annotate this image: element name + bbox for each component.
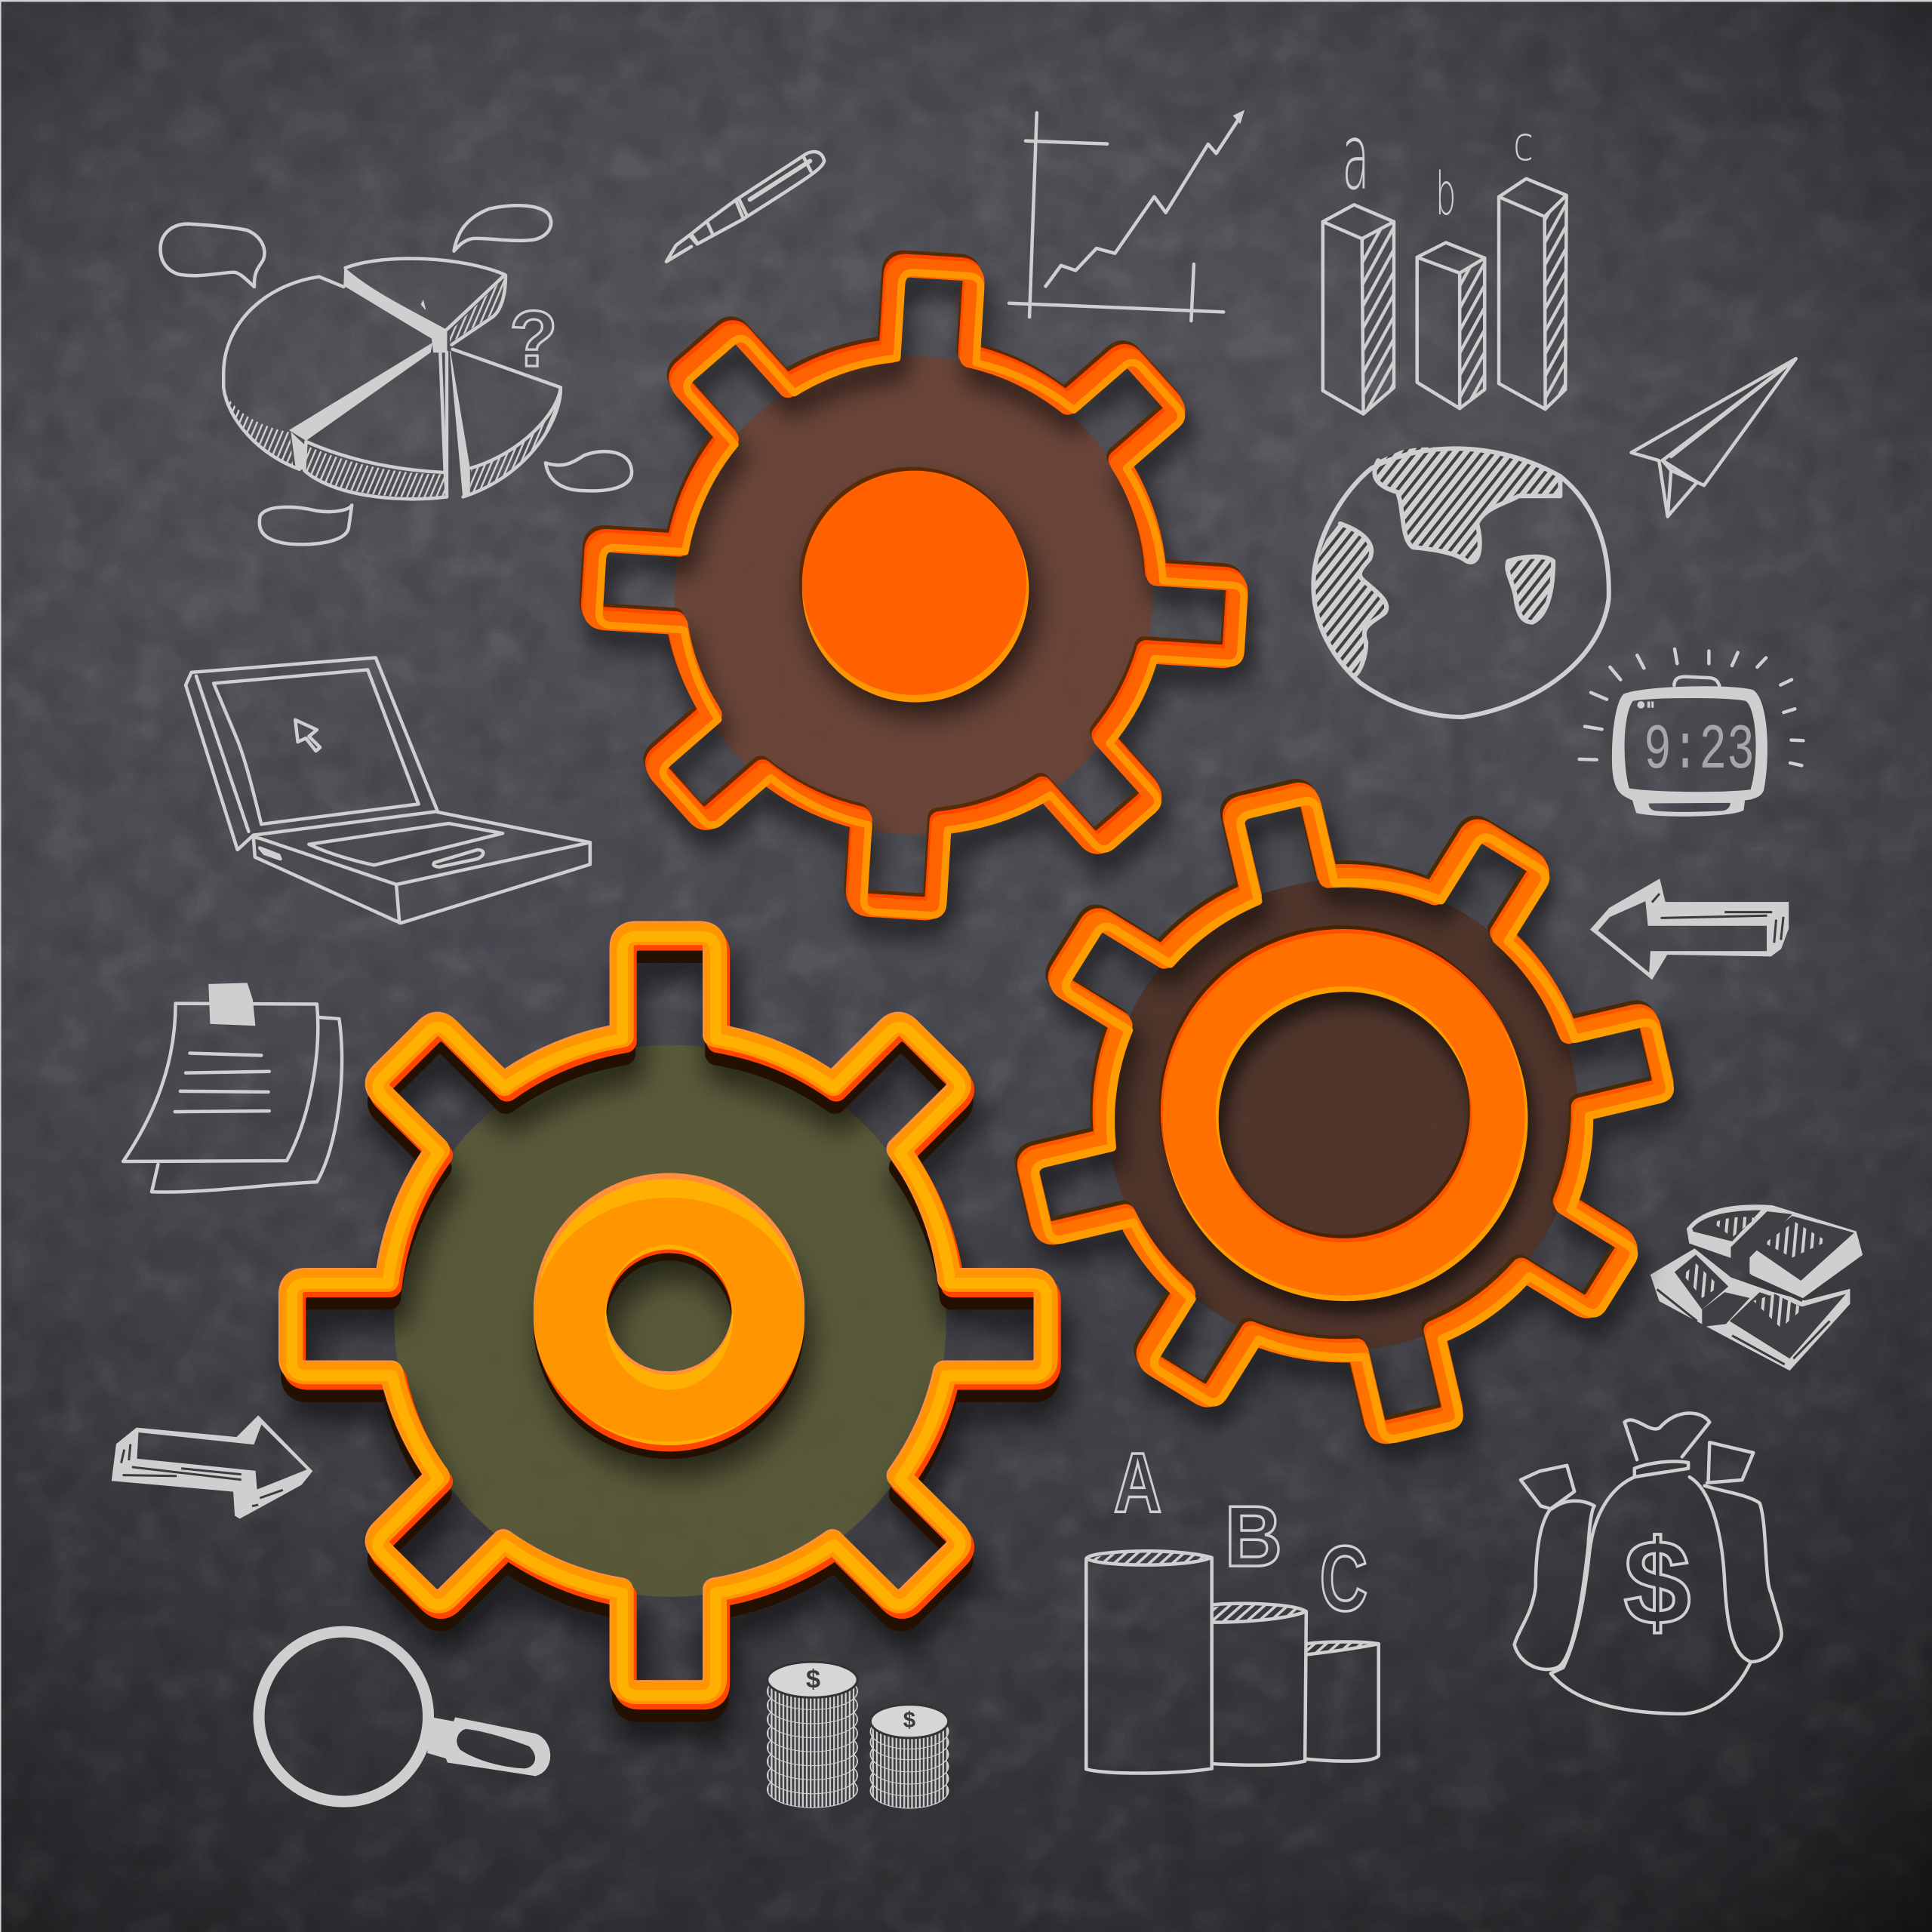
doodle: cylinder bar chart with A B C: B [1225, 1489, 1282, 1585]
question mark: ? [509, 295, 558, 383]
gear ring hub [534, 1173, 804, 1459]
doodle: coin stacks: $ [903, 1708, 915, 1733]
gear frame [955, 723, 1734, 1516]
gear disc [1108, 880, 1578, 1350]
bar labels [1342, 103, 1534, 229]
doodle: digital alarm clock: 9:23 [1644, 715, 1755, 787]
bar labels: b [1435, 159, 1456, 229]
doodle: cylinder bar chart with A B C [1086, 1436, 1379, 1774]
doodle: cylinder bar chart with A B C: A [1114, 1436, 1161, 1531]
gear hub [799, 467, 1038, 717]
doodle: globe [1313, 447, 1609, 717]
gear frame [572, 242, 1263, 946]
bar labels: a [1342, 103, 1370, 211]
doodle: 3D bar chart [1323, 179, 1567, 414]
bar labels: c [1513, 118, 1534, 172]
doodle: coin stacks: $ [806, 1666, 820, 1694]
doodle: right-pointing arrow [112, 1416, 312, 1518]
doodle: sticky notes [123, 983, 342, 1192]
right gear [955, 723, 1734, 1516]
large bottom-left gear [291, 933, 1053, 1725]
top gear [572, 242, 1263, 946]
doodle: paper plane [1631, 358, 1796, 516]
doodle: fountain pen [666, 152, 824, 262]
doodle: digital alarm clock [1580, 649, 1803, 816]
doodle: magnifying glass [259, 1632, 550, 1801]
gear disc [675, 356, 1152, 834]
doodle: laptop [186, 658, 590, 923]
doodle: line chart with rising arrow [1009, 111, 1244, 321]
doodle: left-pointing arrow [1591, 879, 1789, 979]
gear frame [291, 933, 1053, 1725]
gear disc [394, 1044, 946, 1597]
doodle: money bags [1515, 1413, 1782, 1714]
gear ring hub [1186, 953, 1504, 1285]
doodle: coin stacks [768, 1662, 949, 1808]
doodle: cylinder bar chart with A B C: C [1320, 1527, 1367, 1630]
doodle: money bags: $ [1623, 1515, 1690, 1650]
doodle: stack of banknotes [1651, 1205, 1863, 1371]
doodle: pie chart with speech bubbles [161, 205, 632, 544]
